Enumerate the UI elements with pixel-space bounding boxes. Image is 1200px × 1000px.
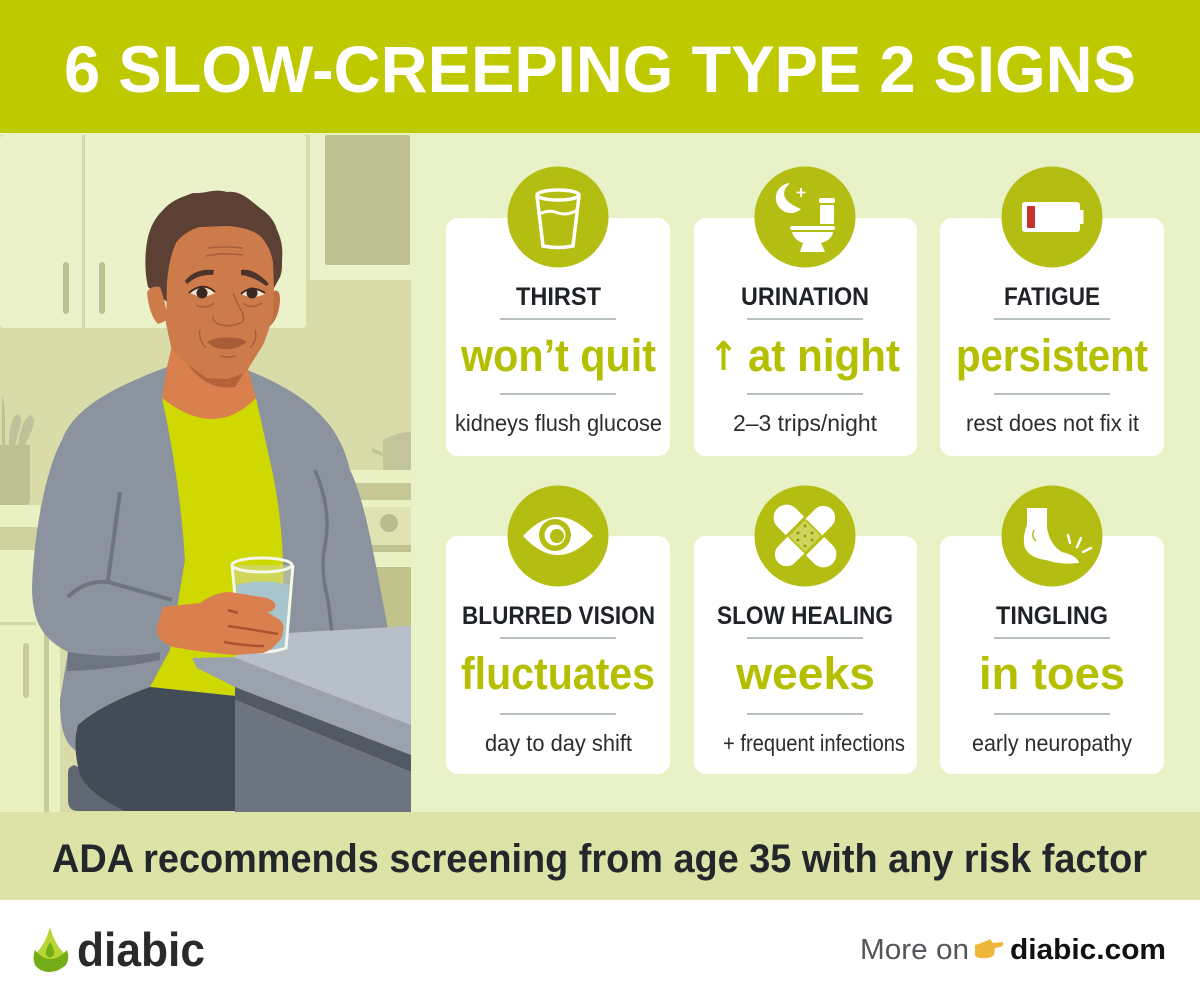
panel: tingling [940, 486, 1164, 774]
neck [162, 345, 256, 419]
cardigan [32, 367, 390, 760]
note: day to day shift [485, 730, 633, 756]
facial features [196, 247, 262, 357]
trousers [75, 687, 235, 811]
cardigan seams [68, 470, 332, 632]
header band [0, 0, 1200, 133]
eyebrows [185, 270, 269, 286]
link: more on diabic.com: More on [860, 934, 969, 966]
hand [157, 592, 284, 655]
logo: diabic: diabic [77, 923, 205, 976]
ears [147, 287, 280, 326]
note: + frequent infections [723, 730, 905, 756]
face [167, 227, 273, 378]
cardigan shadow hem [67, 652, 160, 671]
eyes [189, 287, 265, 298]
link: more on diabic.com [860, 934, 1166, 966]
icon: foot with tingles [1002, 486, 1102, 586]
key value: weeks [735, 648, 875, 699]
heading: FATIGUE [1004, 283, 1100, 311]
panel: thirst [446, 166, 670, 456]
stool [68, 765, 125, 811]
illustration: woman at kitchen counter [0, 135, 411, 812]
note: rest does not fix it [966, 410, 1140, 436]
link: more on diabic.com: diabic.com [1010, 934, 1166, 966]
icon: eye [508, 486, 608, 586]
panel: urination [694, 166, 917, 456]
icon: glass of water [508, 166, 608, 268]
key value: won’t quit [460, 330, 656, 381]
note: early neuropathy [972, 730, 1132, 756]
icon: bandage [754, 486, 856, 586]
icon: drop [34, 927, 68, 972]
title: 6 SLOW-CREEPING TYPE 2 SIGNS [64, 32, 1136, 106]
icon: low battery [1002, 166, 1102, 268]
heading: BLURRED VISION [462, 602, 655, 630]
counter [192, 626, 411, 812]
key value: at night [748, 330, 900, 381]
kitchen background [0, 135, 411, 812]
heading: SLOW HEALING [717, 602, 893, 630]
heading: URINATION [741, 283, 869, 311]
yellow shirt [150, 398, 283, 696]
panel: fatigue [940, 166, 1164, 456]
drinking glass [232, 558, 293, 652]
heading: THIRST [516, 283, 601, 311]
key value: ↑ [709, 334, 738, 380]
chin shadow [183, 358, 247, 388]
key value: persistent [956, 330, 1148, 381]
mouth [207, 338, 247, 349]
heading: TINGLING [996, 602, 1108, 630]
icon: pointing hand [975, 939, 1003, 958]
note: 2–3 trips/night [733, 410, 878, 436]
key value: in toes [979, 648, 1125, 699]
screening banner [0, 812, 1200, 900]
panel: blurred vision [446, 486, 670, 774]
screening banner: ADA recommends screening from age 35 with any risk factor [52, 837, 1147, 881]
panel: slow healing [694, 486, 917, 774]
icon: moon and toilet [754, 166, 856, 268]
key value: fluctuates [461, 648, 655, 699]
note: kidneys flush glucose [455, 410, 662, 436]
panel background [0, 133, 1200, 813]
hair [145, 191, 282, 302]
